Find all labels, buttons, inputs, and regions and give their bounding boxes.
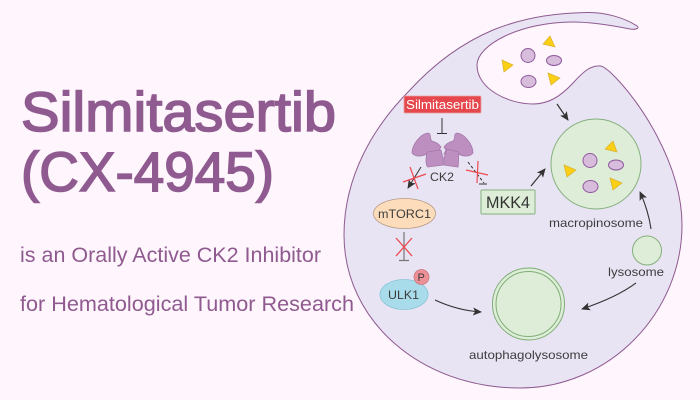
arrow: lysosome to macropinosome [640,192,651,229]
mTORC1 [374,198,436,228]
MKK4 box [481,190,535,214]
arrow: lysosome to autophagolysosome [582,283,636,309]
engulfed cargo [502,36,562,88]
MKK4 box: MKK4 [486,194,530,212]
title: (CX-4945) [21,140,274,203]
subtitle: for Hematological Tumor Research [20,293,354,316]
ULK1 [380,280,428,310]
label: CK2: CK2 [430,170,454,184]
CK2 protein [412,133,473,167]
macropinosome [551,119,641,209]
arrow: ULK1 to autophagolysosome [435,300,481,312]
subtitle: is an Orally Active CK2 Inhibitor [20,244,321,267]
arrow: MKK4 to macropinosome [531,169,545,186]
blocked arrow to mTORC1 [403,167,426,189]
subtitle [20,244,354,316]
title: Silmitasertib [21,80,336,143]
phospho P: P [418,272,425,284]
cell diagram [344,12,682,388]
blocked inhibition mTORC1 to ULK1 [396,232,412,260]
inhibition line [437,118,447,134]
autophagolysosome [492,268,564,340]
label: autophagolysosome: autophagolysosome [469,348,588,362]
cell body [344,12,682,388]
arrow into macropinosome [557,104,568,120]
label: lysosome: lysosome [608,265,664,279]
drug label: Silmitasertib: Silmitasertib [406,98,479,112]
ULK1: ULK1 [388,288,419,302]
lysosome [632,236,662,265]
title [21,80,336,203]
blocked arrow to MKK4 [466,161,488,184]
label: macropinosome: macropinosome [549,216,643,230]
mTORC1: mTORC1 [378,207,431,221]
phospho P [414,270,429,284]
